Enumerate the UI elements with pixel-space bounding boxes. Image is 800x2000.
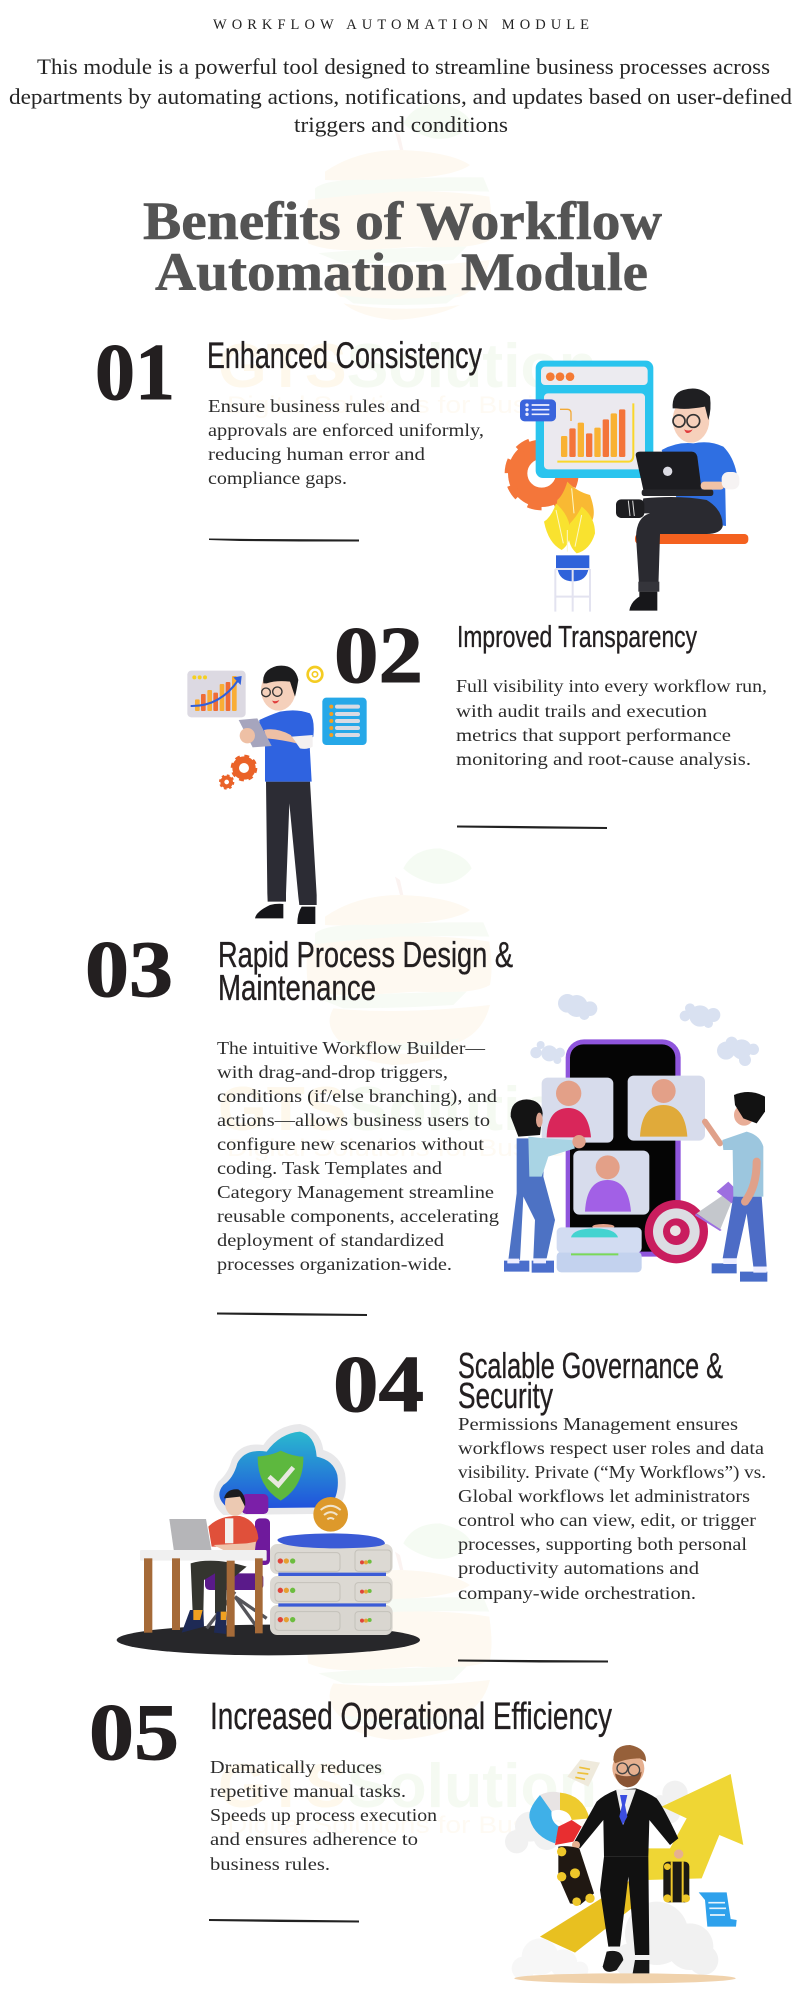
main heading: Benefits of Workflow <box>143 191 662 251</box>
rule 01 <box>209 538 359 542</box>
body 02: Full visibility into every workflow run, <box>456 676 767 696</box>
panel: benefit 01 <box>95 329 748 612</box>
title 04 <box>458 1345 723 1416</box>
body 05 <box>210 1757 437 1874</box>
body 04: visibility. Private (“My Workflows”) vs. <box>458 1462 766 1483</box>
body 03: coding. Task Templates and <box>217 1158 442 1178</box>
number 03: 03 <box>85 926 173 1014</box>
body 03: with drag-and-drop triggers, <box>217 1062 448 1082</box>
main heading: Automation Module <box>155 242 648 302</box>
number 04: 04 <box>333 1341 424 1429</box>
body 01 <box>208 396 484 488</box>
rule 03 <box>217 1312 367 1316</box>
panel: benefit 04 <box>117 1341 766 1662</box>
body 03: reusable components, accelerating <box>217 1206 499 1226</box>
body 03: deployment of standardized <box>217 1230 444 1250</box>
illustration: cloud security and servers <box>117 1424 420 1655</box>
body 04: Global workflows let administrators <box>458 1486 750 1506</box>
body 04: productivity automations and <box>458 1558 699 1578</box>
body 05: repetitive manual tasks. <box>210 1781 406 1801</box>
eyebrow: WORKFLOW AUTOMATION MODULE <box>213 17 589 33</box>
body 03: Category Management streamline <box>217 1182 494 1202</box>
main heading <box>143 191 662 302</box>
number 01: 01 <box>95 329 175 417</box>
body 02: monitoring and root-cause analysis. <box>456 749 751 769</box>
body 05: and ensures adherence to <box>210 1829 418 1849</box>
title 05: Increased Operational Efficiency <box>210 1696 612 1738</box>
body 02: metrics that support performance <box>456 725 731 745</box>
number 02: 02 <box>334 612 423 700</box>
rule 04 <box>458 1660 608 1662</box>
body 01: approvals are enforced uniformly, <box>208 420 484 440</box>
watermark: middle: Digital Solutions for Business <box>227 1135 593 1162</box>
watermark: top: Digital Solutions for Business <box>227 392 593 419</box>
intro paragraph: departments by automating actions, notifications, and updates based on user-defined <box>9 84 792 109</box>
body 01: reducing human error and <box>208 444 425 464</box>
illustration: analyst with laptop <box>509 361 748 612</box>
panel: benefit 05 <box>89 1689 743 1983</box>
watermark: middle <box>218 848 597 1162</box>
body 04: workflows respect user roles and data <box>458 1438 764 1458</box>
body 05: Dramatically reduces <box>210 1757 382 1777</box>
body 01: compliance gaps. <box>208 468 347 488</box>
title 02: Improved Transparency <box>457 619 697 654</box>
body 04: company-wide orchestration. <box>458 1583 696 1603</box>
panel: benefit 02 <box>187 612 767 924</box>
body 05: Speeds up process execution <box>210 1805 437 1825</box>
watermark: bottom: GTSSolution <box>218 1752 597 1821</box>
number 05: 05 <box>89 1689 179 1777</box>
watermark: middle: GTSSolution <box>218 1075 597 1144</box>
body 02: with audit trails and execution <box>456 701 707 721</box>
intro paragraph: This module is a powerful tool designed to streamline business processes across <box>37 54 770 79</box>
illustration: man with tablet <box>187 666 367 924</box>
watermark: bottom <box>218 1523 597 1839</box>
rule 05 <box>209 1919 359 1922</box>
watermark: bottom: Digital Solutions for Business <box>227 1812 593 1839</box>
body 04: processes, supporting both personal <box>458 1534 747 1554</box>
illustration: businessman with growth arrow <box>505 1745 743 1983</box>
intro paragraph <box>9 54 792 137</box>
title 03: Maintenance <box>218 967 376 1008</box>
body 03: conditions (if/else branching), and <box>217 1086 497 1107</box>
title 03: Rapid Process Design & <box>218 934 513 975</box>
panel: benefit 03 <box>85 926 767 1316</box>
watermark: top: GTSSolution <box>218 332 597 401</box>
watermark: top <box>218 103 597 419</box>
body 01: Ensure business rules and <box>208 396 420 416</box>
body 04: control who can view, edit, or trigger <box>458 1510 756 1530</box>
intro paragraph: triggers and conditions <box>294 112 508 137</box>
body 02 <box>456 676 767 769</box>
body 03: processes organization-wide. <box>217 1254 452 1274</box>
body 03 <box>217 1038 499 1274</box>
body 04: Permissions Management ensures <box>458 1414 738 1434</box>
body 03: actions—allows business users to <box>217 1110 490 1130</box>
body 03: The intuitive Workflow Builder— <box>217 1038 486 1058</box>
title 03 <box>218 934 513 1008</box>
illustration: team with phone <box>504 994 767 1282</box>
body 04 <box>458 1414 766 1603</box>
title 01: Enhanced Consistency <box>207 335 482 376</box>
body 05: business rules. <box>210 1854 330 1874</box>
rule 02 <box>457 826 607 829</box>
title 04: Security <box>458 1375 553 1416</box>
body 03: configure new scenarios without <box>217 1134 484 1154</box>
